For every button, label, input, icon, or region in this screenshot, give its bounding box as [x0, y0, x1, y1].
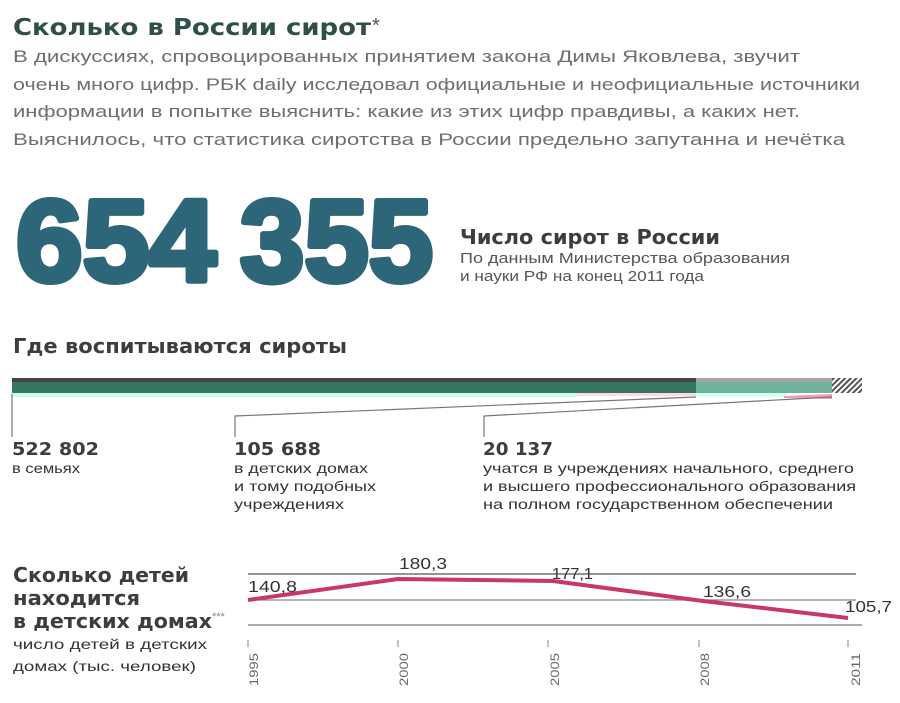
- year labels: 2008: [698, 653, 712, 686]
- chart heading: в детских домах: [13, 609, 212, 633]
- stat: in orphanages: 105 688: [234, 439, 321, 460]
- data values: 180,3: [399, 556, 447, 573]
- year labels: 2011: [849, 653, 863, 686]
- stat: in orphanages: учреждениях: [234, 496, 344, 512]
- chart heading: [13, 563, 226, 674]
- title: Сколько в России сирот: [13, 15, 372, 41]
- chart heading: Сколько детей: [13, 563, 189, 587]
- intro text block: [13, 47, 860, 149]
- stacked bar: [12, 378, 862, 399]
- stat: in families: 522 802: [12, 439, 99, 460]
- big number caption: [460, 225, 790, 285]
- big number: 654: [16, 176, 216, 306]
- year ticks: [248, 640, 848, 647]
- big number caption: и науки РФ на конец 2011 года: [460, 269, 705, 285]
- stat: in orphanages: и тому подобных: [234, 478, 376, 494]
- intro text block: Выяснилось, что статистика сиротства в России предельно запутанна и нечётка: [13, 130, 846, 149]
- stat: students: учатся в учреждениях начального, среднего: [483, 460, 854, 476]
- stat: in families: [12, 439, 99, 476]
- stat: in orphanages: [234, 439, 376, 512]
- year labels: 2005: [548, 653, 562, 686]
- big number caption: По данным Министерства образования: [460, 251, 790, 267]
- heading: where orphans are raised: Где воспитываются сироты: [13, 334, 347, 358]
- title: *: [372, 15, 380, 37]
- intro text block: информации в попытке выяснить: какие из этих цифр правдивы, а каких нет.: [13, 102, 800, 121]
- line chart: [247, 556, 892, 686]
- stat: students: и высшего профессионального образования: [483, 478, 856, 494]
- leader lines: [12, 394, 832, 437]
- year labels: 2000: [397, 653, 411, 686]
- stat: in families: в семьях: [12, 460, 80, 476]
- big number: 355: [240, 176, 433, 306]
- stat: students: 20 137: [483, 439, 553, 460]
- chart heading: домах (тыс. человек): [13, 658, 196, 674]
- big number: [16, 176, 433, 306]
- year labels: [247, 653, 863, 686]
- stat: students: на полном государственном обеспечении: [483, 496, 833, 512]
- data values: 177,1: [552, 566, 593, 583]
- data line: [248, 579, 848, 618]
- chart heading: число детей в детских: [13, 636, 207, 652]
- intro text block: В дискуссиях, спровоцированных принятием закона Димы Яковлева, звучит: [13, 47, 800, 66]
- stat: in orphanages: в детских домах: [234, 460, 368, 476]
- intro text block: очень много цифр. РБК daily исследовал официальные и неофициальные источники: [13, 75, 860, 94]
- data values: 136,6: [703, 584, 751, 601]
- chart heading: ***: [212, 611, 226, 623]
- year labels: 1995: [247, 653, 261, 686]
- data values: [248, 556, 892, 616]
- stat: students: [483, 439, 856, 512]
- chart heading: находится: [13, 586, 140, 610]
- data values: 105,7: [845, 599, 892, 616]
- big number caption: Число сирот в России: [460, 225, 720, 249]
- data values: 140,8: [248, 579, 297, 596]
